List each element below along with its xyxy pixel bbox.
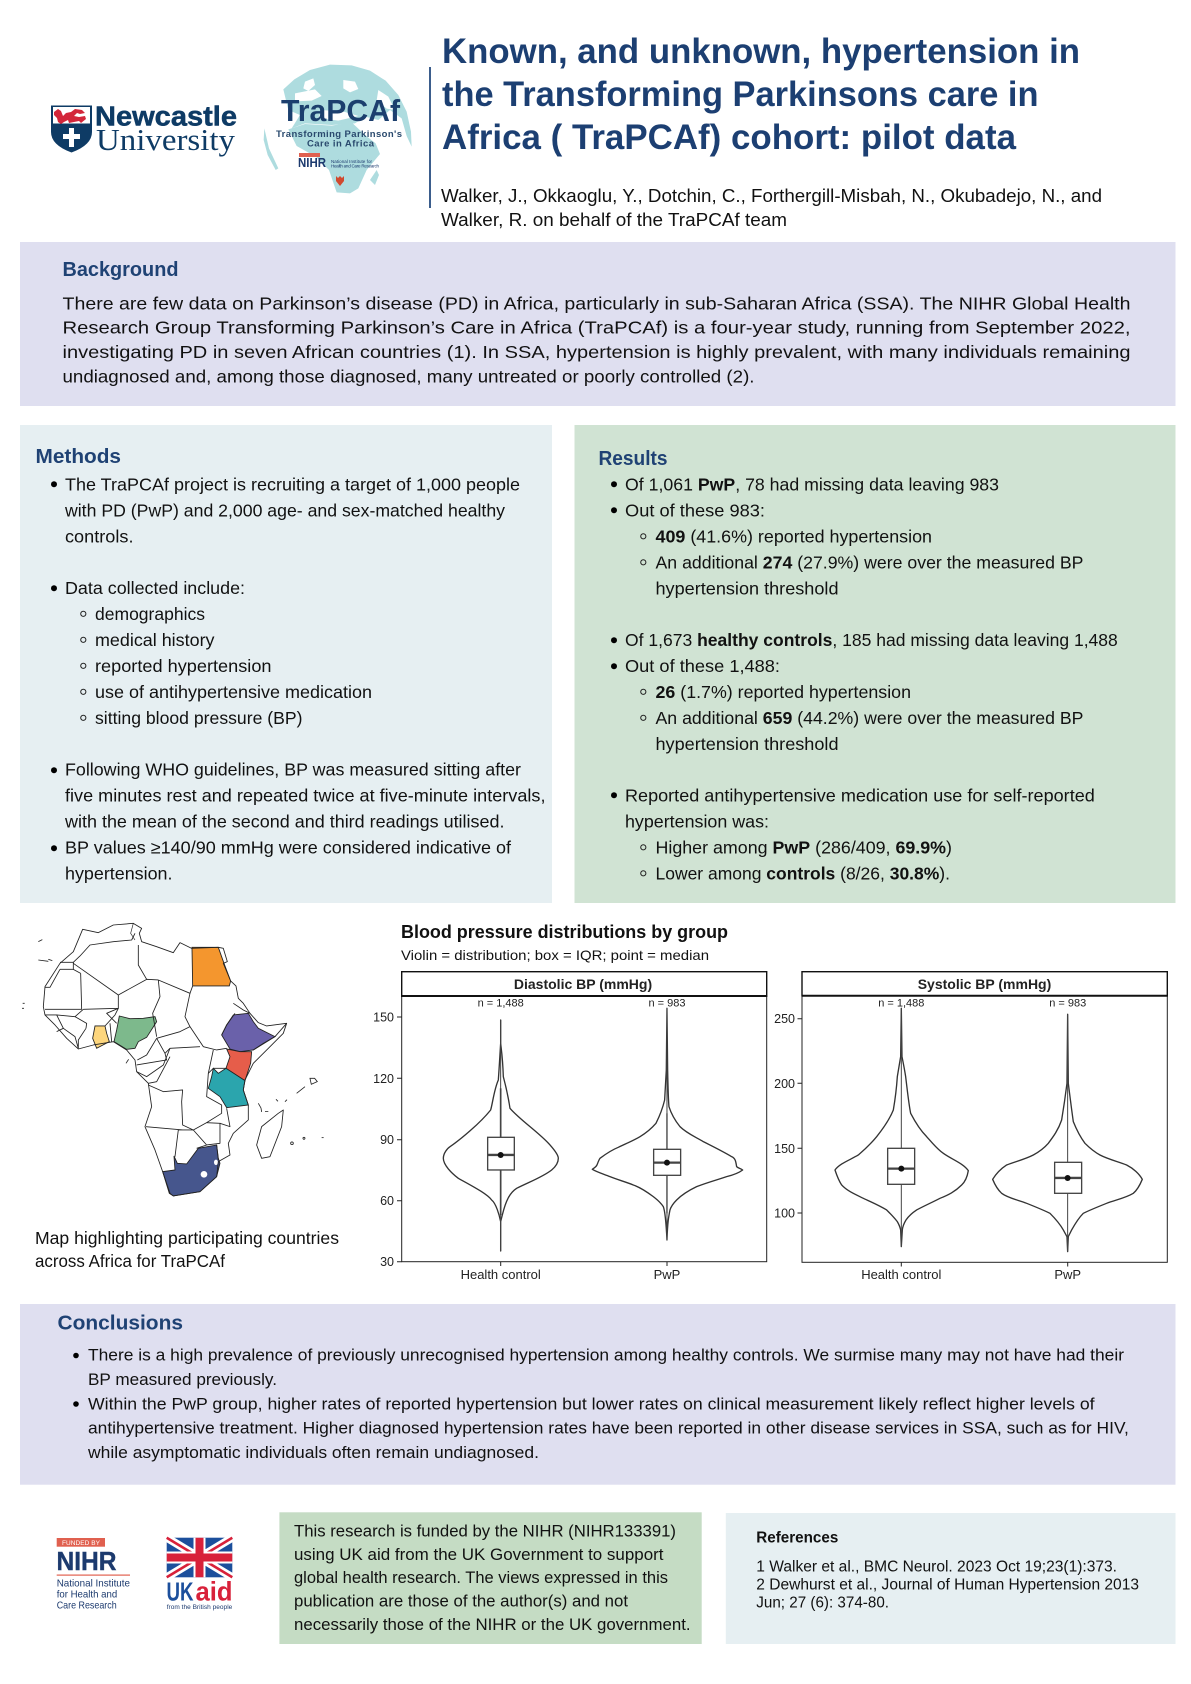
violin: systolic PwP <box>993 1014 1142 1252</box>
map: Nigeria <box>114 1016 157 1049</box>
logo: Newcastle University <box>51 101 237 157</box>
logo: NIHR: FUNDED BY <box>62 1540 101 1547</box>
icon: union flag <box>167 1538 232 1577</box>
logo: UK aid: aid <box>196 1577 232 1607</box>
logo: TraPCAf globe: TraPCAf <box>281 93 401 128</box>
chart panel: diastolic <box>373 972 767 1282</box>
list: methods: demographics <box>95 604 205 624</box>
logo: Newcastle University: University <box>96 122 236 157</box>
chart panel: systolic <box>774 972 1168 1282</box>
logo: UK aid <box>166 1538 233 1611</box>
chart panel: systolic: n = 983 <box>1049 998 1086 1010</box>
chart panel: systolic: 150 <box>774 1142 795 1156</box>
heading: conclusions: Conclusions <box>58 1312 183 1334</box>
logo: NIHR: National Institute <box>57 1578 130 1590</box>
panel: funding statement: publication are those of the author(s) and not <box>294 1592 628 1611</box>
violin: systolic health control <box>835 1008 968 1247</box>
list: methods: use of antihypertensive medication <box>95 682 372 702</box>
logo: NIHR: for Health and <box>57 1588 117 1600</box>
panel: funding statement: global health research. The views expressed in this <box>294 1568 668 1587</box>
panel: conclusions <box>20 1304 1176 1485</box>
list: results: hypertension was: <box>625 811 769 831</box>
list: conclusions: antihypertensive treatment. Higher diagnosed hypertension rates have been reported in other disease services in SSA, such as for HIV, <box>88 1419 1129 1438</box>
chart panel: systolic: 250 <box>774 1012 795 1026</box>
list: results: Of 1,061 PwP, 78 had missing data leaving 983 <box>625 474 999 494</box>
chart panel: diastolic: PwP <box>654 1267 680 1282</box>
chart panel: diastolic: 30 <box>380 1255 394 1269</box>
violin: diastolic PwP <box>592 1008 743 1240</box>
list: results: hypertension threshold <box>656 578 838 598</box>
list: methods: sitting blood pressure (BP) <box>95 708 302 728</box>
list: methods <box>51 474 546 883</box>
chart panel: diastolic: 60 <box>380 1194 394 1208</box>
list: conclusions: while asymptomatic individuals often remain undiagnosed. <box>87 1443 539 1462</box>
chart panel: systolic: n = 1,488 <box>878 998 924 1010</box>
authors <box>441 186 1102 230</box>
map: country outlines <box>43 923 287 1196</box>
list: results: Out of these 1,488: <box>625 656 780 676</box>
text block: references <box>756 1559 1139 1611</box>
logo: Newcastle University: Newcastle <box>95 101 237 132</box>
chart panel: systolic: Systolic BP (mmHg) <box>918 976 1051 992</box>
list: methods: BP values ≥140/90 mmHg were considered indicative of <box>65 837 511 857</box>
logo: TraPCAf globe: National Institute for <box>331 159 372 164</box>
map: Ethiopia <box>222 1013 275 1052</box>
chart panel: diastolic: Health control <box>461 1267 541 1282</box>
heading: methods: Methods <box>36 446 121 468</box>
chart panel: diastolic: n = 983 <box>648 998 686 1010</box>
text block: background: There are few data on Parkinson’s disease (PD) in Africa, particularly in sub-Saharan Africa (SSA). The NIHR Global Health <box>62 293 1130 313</box>
chart panel: systolic: 100 <box>774 1206 795 1220</box>
map: South Africa <box>163 1145 220 1196</box>
text block: background: undiagnosed and, among those diagnosed, many untreated or poorly controlled (2). <box>62 366 754 386</box>
list: results: Out of these 983: <box>625 500 765 520</box>
list: methods: with the mean of the second and third readings utilised. <box>64 811 505 831</box>
list: results <box>611 474 1118 883</box>
title <box>442 32 1080 157</box>
logo: TraPCAf globe: Care in Africa <box>307 138 375 150</box>
chart panel: diastolic: n = 1,488 <box>478 998 524 1010</box>
list: conclusions <box>73 1346 1129 1462</box>
chart title: Blood pressure distributions by group <box>401 922 728 942</box>
list: results: An additional 659 (44.2%) were over the measured BP <box>656 708 1084 728</box>
list: methods: five minutes rest and repeated twice at five-minute intervals, <box>65 785 546 805</box>
map: Egypt <box>192 947 231 986</box>
chart panel: diastolic: 120 <box>373 1072 394 1086</box>
logo: NIHR: Care Research <box>57 1600 117 1612</box>
header divider <box>429 67 431 208</box>
authors: Walker, J., Okkaoglu, Y., Dotchin, C., Forthergill-Misbah, N., Okubadejo, N., and <box>441 186 1102 206</box>
authors: Walker, R. on behalf of the TraPCAf team <box>441 210 787 230</box>
list: results: An additional 274 (27.9%) were over the measured BP <box>656 552 1084 572</box>
map: small islands <box>22 940 324 1145</box>
heading: background: Background <box>62 259 178 281</box>
logo: TraPCAf globe: NIHR <box>298 156 326 170</box>
text block: references: Jun; 27 (6): 374-80. <box>756 1594 889 1611</box>
panel: funding statement <box>279 1512 702 1644</box>
map: Africa with participating countries <box>22 923 324 1196</box>
list: conclusions: Within the PwP group, higher rates of reported hypertension but lower rates on clinical measurement likely reflect higher levels of <box>88 1394 1095 1413</box>
chart panel: diastolic: 150 <box>373 1010 394 1024</box>
violin: diastolic health control <box>443 1020 558 1251</box>
chart subtitle: Violin = distribution; box = IQR; point = median <box>401 947 709 963</box>
text block: background: Research Group Transforming Parkinson’s Care in Africa (TraPCAf) is a four-year study, running from September 2022, <box>62 317 1130 337</box>
map caption: across Africa for TraPCAf <box>35 1251 225 1271</box>
list: methods: controls. <box>65 526 134 546</box>
chart: blood pressure distributions <box>373 922 1168 1282</box>
chart panel: systolic: PwP <box>1054 1267 1081 1282</box>
map: Tanzania <box>208 1068 248 1108</box>
list: conclusions: BP measured previously. <box>88 1370 277 1389</box>
list: results: Lower among controls (8/26, 30.8%). <box>656 863 950 883</box>
list: results: Higher among PwP (286/409, 69.9%) <box>656 837 952 857</box>
text block: references: 2 Dewhurst et al., Journal of Human Hypertension 2013 <box>756 1577 1139 1594</box>
map: Kenya <box>226 1049 252 1081</box>
map: Ghana <box>93 1026 109 1048</box>
chart panel: diastolic: 90 <box>380 1133 394 1147</box>
chart panel: systolic: Health control <box>861 1267 942 1282</box>
logo: UK aid: from the British people <box>167 1604 233 1611</box>
list: methods: The TraPCAf project is recruiting a target of 1,000 people <box>65 474 520 494</box>
panel: funding statement: necessarily those of the NIHR or the UK government. <box>294 1615 691 1634</box>
list: methods: with PD (PwP) and 2,000 age- and sex-matched healthy <box>64 500 505 520</box>
title: the Transforming Parkinsons care in <box>442 75 1038 114</box>
panel: references <box>726 1513 1176 1644</box>
list: results: Of 1,673 healthy controls, 185 had missing data leaving 1,488 <box>625 630 1118 650</box>
list: conclusions: There is a high prevalence of previously unrecognised hypertension among healthy controls. We surmise many may not have had their <box>88 1346 1124 1365</box>
list: methods: Data collected include: <box>65 578 245 598</box>
list: methods: hypertension. <box>65 863 172 883</box>
panel: methods <box>20 425 552 903</box>
panel: funding statement: using UK aid from the UK Government to support <box>294 1545 664 1564</box>
chart panel: diastolic: Diastolic BP (mmHg) <box>514 976 652 992</box>
list: methods: reported hypertension <box>95 656 272 676</box>
chart panel: systolic: 200 <box>774 1077 795 1091</box>
text block: references: 1 Walker et al., BMC Neurol. 2023 Oct 19;23(1):373. <box>756 1559 1117 1576</box>
panel: results <box>574 425 1176 903</box>
map caption: Map highlighting participating countries <box>35 1228 339 1248</box>
list: results: Reported antihypertensive medication use for self-reported <box>625 785 1095 805</box>
logo: TraPCAf globe: Transforming Parkinson's <box>276 129 402 140</box>
title: Known, and unknown, hypertension in <box>442 32 1080 71</box>
text block: background <box>62 293 1130 386</box>
logo: TraPCAf globe <box>264 65 412 193</box>
logo: NIHR: NIHR <box>56 1546 117 1576</box>
logo: NIHR <box>56 1538 130 1612</box>
list: results: 409 (41.6%) reported hypertension <box>656 526 932 546</box>
heading: references: References <box>756 1530 838 1547</box>
title: Africa ( TraPCAf) cohort: pilot data <box>442 118 1017 157</box>
logo: TraPCAf globe: Health and Care Research <box>331 164 379 168</box>
logo: UK aid: UK <box>166 1577 194 1607</box>
list: methods: medical history <box>95 630 215 650</box>
text block: background: investigating PD in seven African countries (1). In SSA, hypertension is highly prevalent, with many individuals remaining <box>62 342 1130 362</box>
panel: background <box>20 242 1176 406</box>
list: results: 26 (1.7%) reported hypertension <box>656 682 911 702</box>
map caption <box>35 1228 339 1271</box>
heading: results: Results <box>598 448 668 470</box>
list: methods: Following WHO guidelines, BP was measured sitting after <box>65 759 521 779</box>
list: results: hypertension threshold <box>656 734 838 754</box>
panel: funding statement: This research is funded by the NIHR (NIHR133391) <box>294 1522 676 1541</box>
